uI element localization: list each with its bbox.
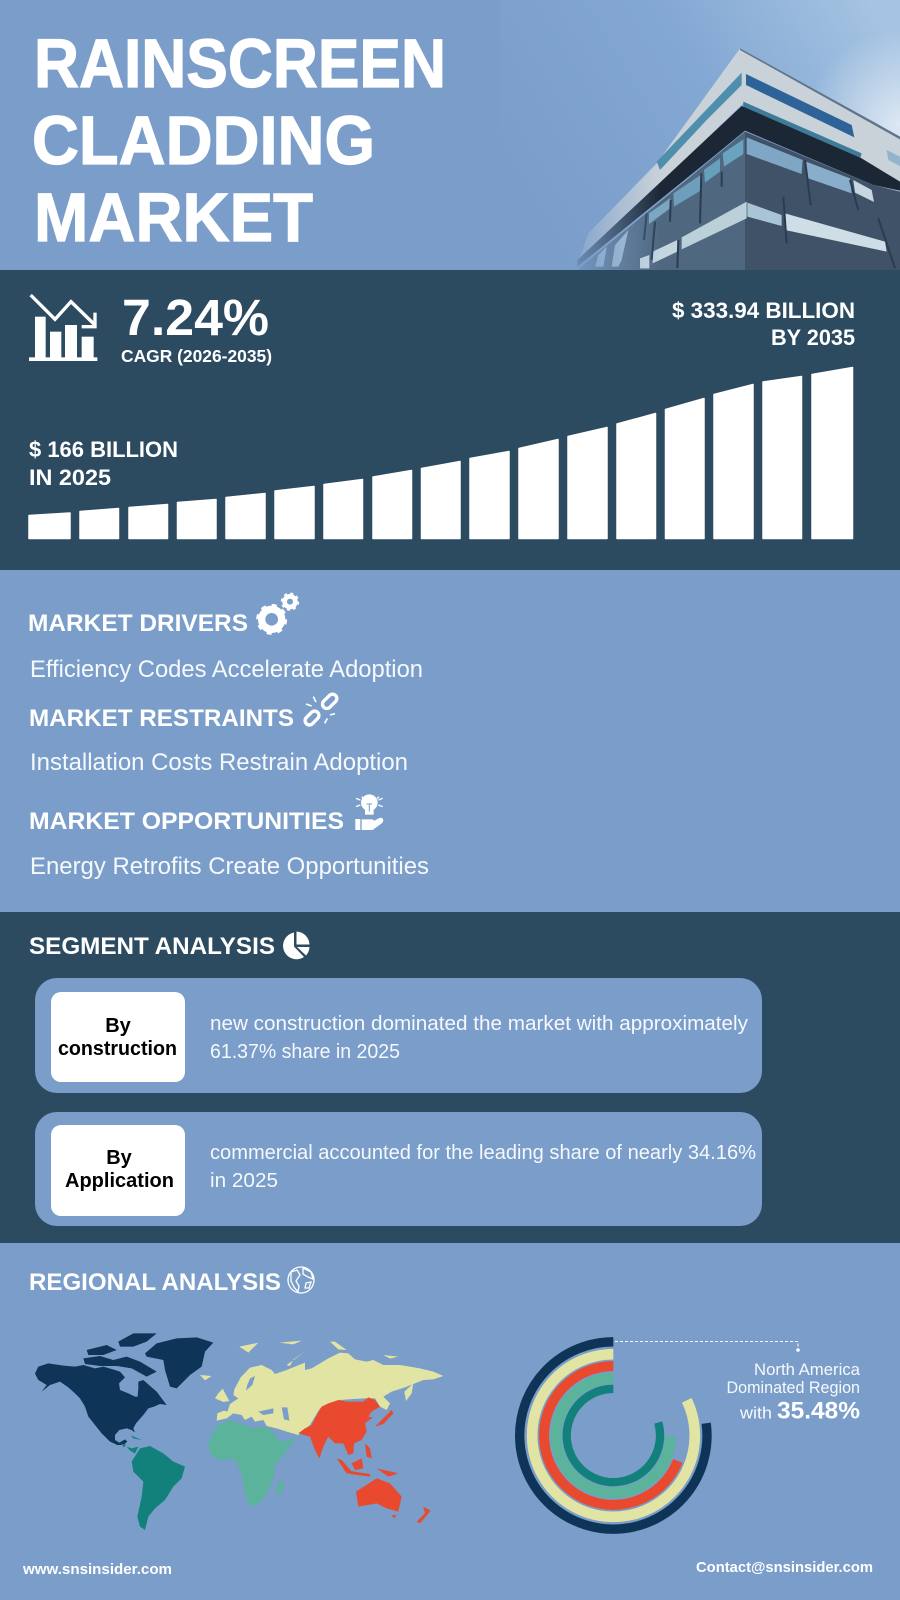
header photo: building against the sky — [578, 0, 900, 270]
icon: globe — [288, 1267, 314, 1293]
callout: North America share: 35.48% — [777, 1398, 860, 1424]
heading: market drivers: MARKET DRIVERS — [28, 610, 248, 637]
label box: by construction: By — [105, 1015, 132, 1037]
region: Asia Pacific — [298, 1397, 431, 1523]
panel: segment analysis — [0, 912, 900, 1243]
2035 value — [672, 298, 855, 350]
callout: North America share: North America — [754, 1361, 861, 1379]
footer: contact: Contact@snsinsider.com — [696, 1559, 873, 1576]
2025 value: $ 166 BILLION — [29, 437, 178, 462]
text: driver: Efficiency Codes Accelerate Adoption — [30, 656, 423, 683]
heading: market restraints: MARKET RESTRAINTS — [29, 705, 294, 732]
title: RAINSCREEN — [34, 25, 446, 102]
icon: broken chain — [303, 692, 339, 727]
CAGR figure: 7.24% — [122, 289, 269, 346]
heading: segment analysis: SEGMENT ANALYSIS — [29, 933, 275, 960]
label box: by construction: construction — [58, 1038, 177, 1060]
region: South America — [121, 1435, 185, 1530]
heading: market opportunities: MARKET OPPORTUNITIES — [29, 808, 344, 835]
title: MARKET — [34, 179, 313, 256]
text: restraint: Installation Costs Restrain Adoption — [30, 749, 408, 776]
label box: by construction — [51, 992, 185, 1082]
callout: North America share — [615, 1342, 861, 1424]
radial bar chart — [520, 1342, 707, 1529]
title — [32, 25, 446, 256]
icon: gears — [258, 594, 298, 633]
icon: bulb in hand — [355, 794, 383, 830]
text: construction share: new construction dominated the market with approximately — [210, 1013, 748, 1035]
card: by construction — [35, 978, 762, 1093]
label box: by application: Application — [65, 1170, 174, 1192]
footer: website: www.snsinsider.com — [22, 1561, 172, 1578]
callout: North America share: Dominated Region — [726, 1379, 860, 1397]
text: construction share: 61.37% share in 2025 — [210, 1041, 400, 1063]
text: opportunity: Energy Retrofits Create Opportunities — [30, 853, 429, 880]
label box: by application — [51, 1125, 185, 1216]
text: application share — [210, 1142, 756, 1192]
heading: regional analysis: REGIONAL ANALYSIS — [29, 1269, 281, 1296]
2025 value: IN 2025 — [29, 465, 111, 490]
icon: chart with trend arrow — [29, 295, 97, 361]
region: North America — [35, 1333, 213, 1445]
region: Africa — [208, 1420, 296, 1507]
2025 value — [29, 437, 178, 490]
text: application share: commercial accounted for the leading share of nearly 34.16% — [210, 1142, 756, 1164]
panel: market size — [0, 270, 900, 570]
CAGR label: CAGR (2026-2035) — [121, 346, 272, 366]
callout: North America share: with — [739, 1404, 772, 1422]
panel: market dynamics — [28, 594, 429, 880]
text: application share: in 2025 — [210, 1170, 278, 1192]
text: construction share — [210, 1013, 748, 1063]
icon: pie chart — [283, 932, 310, 959]
card: by application — [35, 1112, 762, 1226]
2035 value: $ 333.94 BILLION — [672, 298, 855, 323]
bar chart: market growth — [29, 368, 852, 538]
label box: by application: By — [106, 1147, 133, 1169]
title: CLADDING — [32, 102, 375, 179]
world map — [35, 1333, 443, 1530]
region: Europe and northern Asia — [200, 1341, 443, 1435]
2035 value: BY 2035 — [771, 325, 855, 350]
